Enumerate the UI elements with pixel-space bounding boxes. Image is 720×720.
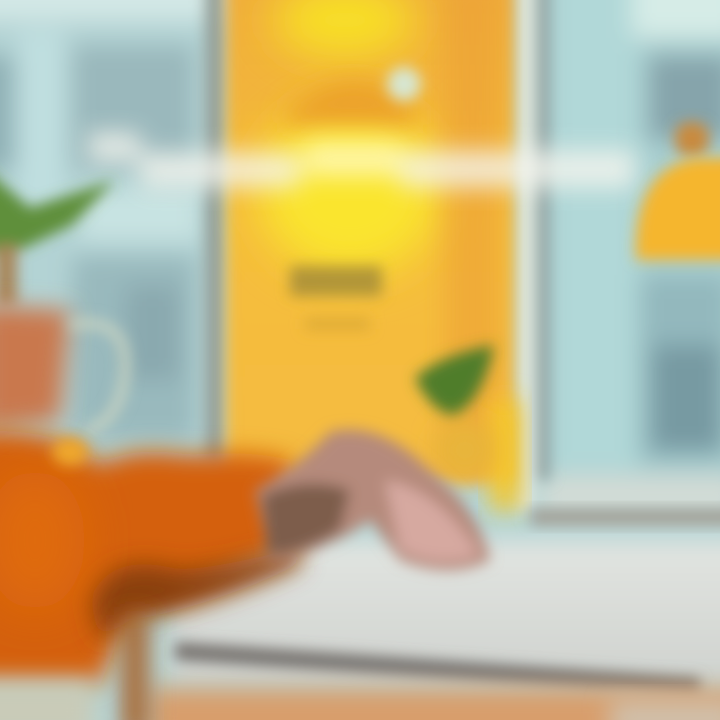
table front edge [175,642,700,696]
table [150,508,720,720]
round white dot [387,67,421,101]
lamp [636,122,720,260]
panel band [285,79,415,125]
terracotta pot [0,305,70,430]
panel lower tint [490,400,520,510]
background: left window [0,0,230,480]
blurred white heading [88,132,635,188]
table underside [150,688,720,720]
window frames [205,0,550,510]
panel glow: centre [258,105,442,275]
mug handle [70,323,125,432]
blurred dark text [290,266,382,330]
plant leaves [0,165,115,305]
small green leaf [415,345,494,418]
bottom-left mug base [0,615,148,720]
leaf stem glow [435,420,495,480]
background: right window [530,0,720,515]
panel edge strip [445,0,500,480]
hand [255,430,490,570]
panel glow: top [273,0,417,58]
orange sweater [0,431,300,685]
yellow panel [226,0,520,510]
